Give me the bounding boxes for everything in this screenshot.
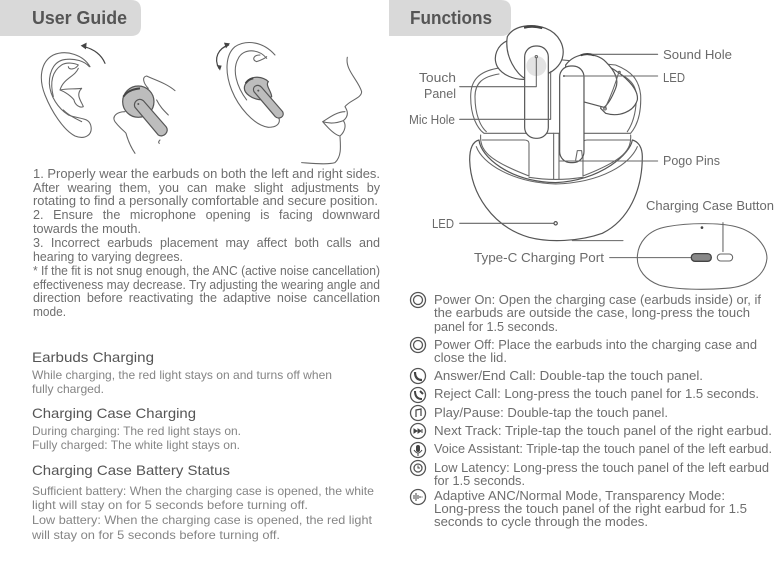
case base	[470, 133, 642, 241]
icon: power off	[410, 338, 426, 352]
text: voice assistant: Voice Assistant: Triple-tap the touch panel of the left earbud.	[434, 442, 772, 456]
instructions text: mode.	[33, 305, 66, 319]
face profile	[302, 57, 362, 164]
instructions text: 1. Properly wear the earbuds on both the left and right sides.	[33, 167, 380, 181]
section: charging case battery status: will stay on for 5 seconds before turning off.	[31, 528, 280, 542]
rotation arrow	[81, 43, 105, 63]
text: reject call: Reject Call: Long-press the touch panel for 1.5 seconds.	[434, 387, 759, 401]
section: earbuds charging: Earbuds Charging	[32, 349, 154, 365]
text: low latency: for 1.5 seconds.	[434, 474, 525, 488]
section: earbuds charging	[32, 349, 332, 396]
section: charging case battery status: Charging Case Battery Status	[32, 462, 230, 478]
text: answer call: Answer/End Call: Double-tap the touch panel.	[434, 369, 703, 383]
diagram labels: Mic Hole	[409, 113, 455, 127]
text: low latency	[434, 461, 769, 488]
earbud with fingers	[114, 76, 175, 153]
icon: answer call	[410, 368, 426, 384]
instructions text: rotating to find a personally comfortable and secure position.	[33, 194, 378, 208]
ear outline	[41, 53, 91, 137]
diagram labels: LED	[663, 71, 685, 85]
text: play pause: Play/Pause: Double-tap the touch panel.	[434, 406, 668, 420]
text: low latency: Low Latency: Long-press the touch panel of the left earbud	[434, 461, 769, 475]
section: charging case battery status: Sufficient battery: When the charging case is opened, the white	[32, 484, 374, 498]
text: ANC mode: seconds to cycle through the modes.	[434, 515, 648, 529]
section: charging case battery status: Low battery: When the charging case is opened, the red light	[32, 513, 373, 527]
icon: ANC mode	[410, 490, 426, 504]
callout lines	[460, 54, 723, 258]
heading tab: Functions: Functions	[410, 8, 492, 28]
section: charging case battery status	[31, 462, 374, 542]
instructions text	[33, 167, 381, 319]
icon: play pause	[410, 406, 426, 420]
text: power off	[434, 338, 757, 365]
text: power off: close the lid.	[434, 351, 507, 365]
illustration: earbud worn in ear with face profile	[217, 43, 362, 164]
small case: bottom view	[637, 224, 767, 289]
diagram labels: Touch	[419, 71, 456, 85]
section: earbuds charging: fully charged.	[32, 382, 104, 396]
diagram labels: LED	[432, 217, 454, 231]
diagram labels	[409, 48, 774, 265]
case lid	[471, 59, 641, 133]
ear with earbud	[227, 43, 283, 127]
heading tab: User Guide: User Guide	[32, 8, 127, 28]
diagram labels: Pogo Pins	[663, 154, 720, 168]
diagram labels: Charging Case Button	[646, 199, 774, 213]
rotation arrow	[217, 43, 230, 71]
illustration: ear and earbud held in fingers	[41, 43, 175, 153]
diagram labels: Panel	[424, 87, 456, 101]
section: charging case charging	[32, 405, 241, 452]
text: power on: the earbuds are outside the case, long-press the touch	[434, 306, 750, 320]
instructions text: After wearing them, you can make slight adjustments by	[33, 181, 381, 195]
diagram: earbuds in charging case	[460, 26, 767, 289]
diagram labels: Type-C Charging Port	[474, 251, 605, 265]
right earbud	[560, 54, 637, 163]
section: charging case charging: Fully charged: The white light stays on.	[32, 438, 240, 452]
section: charging case charging: Charging Case Charging	[32, 405, 196, 421]
section: charging case battery status: light will stay on for 5 seconds before turning off.	[32, 498, 308, 512]
instructions text: 2. Ensure the microphone opening is facing downward	[33, 208, 380, 222]
function list	[410, 292, 772, 529]
instructions text: towards the mouth.	[33, 222, 141, 236]
text: power on: panel for 1.5 seconds.	[434, 320, 558, 334]
instructions text: * If the fit is not snug enough, the ANC (active noise cancellation)	[33, 264, 380, 278]
text: ANC mode	[434, 489, 747, 529]
text: power on: Power On: Open the charging case (earbuds inside) or, if	[434, 293, 762, 307]
instructions text: effectiveness may decrease. Try adjusting the wearing angle and	[33, 278, 380, 292]
icon: next track	[410, 424, 426, 438]
icon: low latency	[410, 460, 426, 476]
text: power on	[434, 293, 762, 334]
section: charging case charging: During charging: The red light stays on.	[32, 424, 241, 438]
heading tab: User Guide	[0, 0, 141, 36]
left earbud	[495, 26, 563, 138]
text: ANC mode: Long-press the touch panel of the right earbud for 1.5	[434, 502, 747, 516]
instructions text: hearing to varying degrees.	[33, 250, 183, 264]
diagram labels: Sound Hole	[663, 48, 732, 62]
icon: voice assistant	[410, 442, 426, 458]
icon: reject call	[410, 388, 426, 402]
text: ANC mode: Adaptive ANC/Normal Mode, Transparency Mode:	[434, 489, 725, 503]
instructions text: 3. Incorrect earbuds placement may affect both calls and	[33, 236, 380, 250]
section: earbuds charging: While charging, the red light stays on and turns off when	[32, 368, 332, 382]
instructions text: direction before reactivating the adaptive noise cancellation	[33, 291, 380, 305]
text: power off: Power Off: Place the earbuds into the charging case and	[434, 338, 757, 352]
heading tab: Functions	[389, 0, 511, 36]
icon: power on	[410, 292, 426, 308]
text: next track: Next Track: Triple-tap the touch panel of the right earbud.	[434, 424, 772, 438]
